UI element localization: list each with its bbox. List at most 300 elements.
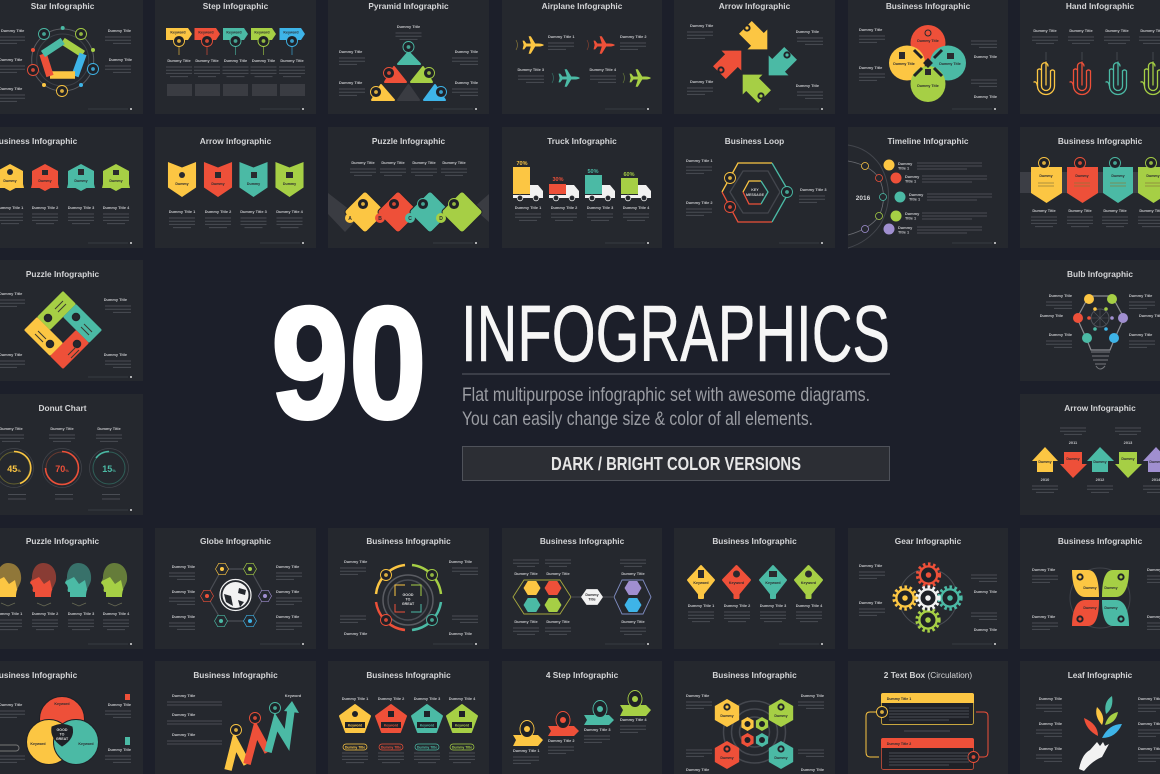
labels: Dummy Title [108, 747, 132, 752]
pentagons: Keyword [420, 724, 434, 728]
ring diagram: TO [406, 598, 411, 602]
shield arrows [168, 162, 304, 197]
hexagon badges: Dummy [3, 179, 17, 183]
labels: Dummy Title 4 [103, 611, 130, 616]
head silhouettes [0, 563, 127, 606]
labels: Dummy Title 2 [32, 611, 59, 616]
labels: Dummy Title [1068, 208, 1092, 213]
timeline labels: Title 1 [905, 178, 917, 184]
panel: pyramid infographic [328, 0, 489, 114]
panel: rising zigzag [155, 661, 316, 774]
banner tags: Dummy [1146, 174, 1160, 178]
step labels and boxes [166, 58, 305, 96]
step tags [166, 28, 305, 55]
banner tags [1020, 158, 1160, 203]
year labels: 2013 [1124, 440, 1133, 445]
heading: Pyramid Infographic [368, 1, 449, 11]
labels: Dummy Title 4 [589, 67, 617, 72]
labels: Dummy Title [621, 619, 645, 624]
ring diagram [376, 565, 441, 630]
panel: business loop [674, 127, 835, 248]
step tags: Keyword [254, 30, 270, 34]
diamonds: Keyword [693, 581, 709, 585]
labels: Dummy Title [1033, 28, 1057, 33]
labels: Dummy Title [344, 631, 368, 636]
timeline labels: Title 1 [909, 196, 921, 202]
hexagon diagram: Dummy [720, 756, 734, 760]
banner tags: Dummy [1039, 174, 1053, 178]
venn circles: GREAT [56, 737, 69, 741]
labels [169, 564, 302, 629]
labels: Dummy Title 2 [620, 34, 647, 39]
labels: Dummy Title [1129, 332, 1153, 337]
truck bars: 50% [587, 169, 599, 175]
heading: Business Infographic [366, 670, 451, 680]
banner tags: Dummy [1111, 174, 1125, 178]
hexagon clusters [513, 580, 651, 614]
puzzle pieces [328, 191, 489, 233]
gears [894, 564, 961, 631]
year labels: 2010 [1041, 477, 1049, 482]
hand icons [1034, 52, 1160, 94]
panel: arrow cycle infographic [674, 0, 835, 114]
panel: gear infographic [848, 528, 1008, 649]
labels: Dummy Title [397, 24, 421, 29]
labels [1032, 567, 1160, 629]
hand with leaves [1079, 696, 1122, 771]
labels: Dummy Title [1040, 313, 1064, 318]
hexagon loop [722, 163, 792, 222]
hexagon badges: Dummy [38, 179, 52, 183]
four petal diagram: Dummy Title [917, 84, 939, 88]
pentagons: Keyword [384, 724, 398, 728]
timeline labels: Dummy [909, 192, 924, 197]
hexagon loop: KEY [751, 188, 759, 192]
labels: Dummy Title [108, 28, 132, 33]
step flags [513, 690, 651, 746]
leaf quadrant diagram: Dummy [1083, 606, 1097, 610]
labels: Dummy Title [546, 619, 570, 624]
labels: Dummy Title [442, 160, 466, 165]
step labels and boxes: Dummy Title [224, 58, 248, 63]
panel: business petals [848, 0, 1008, 114]
panel: bulb infographic [1020, 260, 1160, 381]
panel: leaf quadrants [1020, 528, 1160, 649]
hexagon diagram: Dummy [774, 714, 788, 718]
heading: Business Loop [725, 136, 784, 146]
labels: Dummy Title [449, 559, 473, 564]
labels: Dummy Title [276, 589, 300, 594]
panel: arrow timeline [1020, 394, 1160, 515]
labels: Dummy Title [455, 80, 479, 85]
leaf quadrant diagram: Dummy [1104, 606, 1118, 610]
pentagons: Dummy Title [452, 746, 472, 750]
heading: Business Infographic [193, 670, 278, 680]
labels: Dummy Title [339, 80, 363, 85]
labels: Dummy Title 3 [587, 205, 614, 210]
labels [0, 205, 130, 224]
puzzle pieces: A [348, 216, 352, 222]
heading: Arrow Infographic [200, 136, 272, 146]
labels: Dummy Title [449, 631, 473, 636]
heading: Hand Infographic [1066, 1, 1134, 11]
labels [340, 559, 478, 636]
star ring diagram [28, 26, 98, 96]
panel: 4 step infographic [502, 661, 662, 774]
labels: Dummy Title [974, 589, 998, 594]
labels [688, 603, 823, 622]
heading: Bulb Infographic [1067, 269, 1133, 279]
labels: Dummy Title [172, 693, 196, 698]
labels: Dummy Title [514, 571, 538, 576]
heading: Business Infographic [712, 670, 797, 680]
diamond puzzle [26, 293, 100, 367]
step labels and boxes: Dummy Title [195, 58, 219, 63]
timeline labels: Title 1 [905, 216, 917, 220]
banner tags: Dummy [1075, 174, 1089, 178]
labels [513, 717, 647, 763]
labels: Dummy Title 3 [800, 187, 827, 192]
diamonds: Keyword [729, 581, 744, 585]
hero: subtitle: You can easily change size & color of all elements. [462, 408, 813, 430]
panel: airplane infographic [502, 0, 662, 114]
panel: arrow shields [155, 127, 316, 248]
labels: Dummy Title [455, 49, 479, 54]
pentagons [340, 705, 477, 750]
panel: business tags [1020, 127, 1160, 248]
panel: hexagon groups [502, 528, 662, 649]
step labels and boxes: Dummy Title [167, 58, 191, 63]
panel: 2 text box circulation [848, 661, 1008, 774]
labels [1032, 28, 1160, 43]
panel: venn diagram [0, 661, 143, 774]
labels [517, 34, 647, 82]
labels: Dummy Title [1069, 28, 1093, 33]
labels: Dummy Title [974, 94, 998, 99]
timeline labels: Dummy [905, 211, 920, 216]
hero: version box [462, 446, 890, 480]
heading: Leaf Infographic [1068, 670, 1133, 680]
labels: Dummy Title [351, 160, 375, 165]
timeline labels: Dummy [898, 225, 913, 230]
hexagon diagram [715, 699, 793, 769]
pentagons: Dummy Title [417, 746, 437, 750]
labels: Dummy Title [690, 79, 714, 84]
text box loop: Dummy Title 1 [887, 697, 911, 701]
hexagon clusters: Dummy [585, 593, 599, 597]
four petal diagram: Dummy Title [917, 39, 939, 43]
text box loop: Dummy Title 2 [887, 742, 911, 746]
panel: business badges [0, 127, 143, 248]
labels: Dummy Title 2 [205, 209, 232, 214]
heading: Globe Infographic [200, 536, 271, 546]
labels [0, 426, 122, 499]
labels: Dummy Title [686, 767, 710, 772]
heading: 2 Text Box (Circulation) [884, 670, 972, 680]
hexagon badges [0, 164, 130, 191]
labels: Dummy Title [344, 559, 368, 564]
truck bars [513, 161, 651, 201]
shield arrows: Dummy [175, 182, 189, 186]
labels: Dummy Title [859, 563, 883, 568]
timeline labels: Title 1 [898, 230, 910, 234]
labels: Dummy Title [859, 27, 883, 32]
panel: diamond tags [674, 528, 835, 649]
labels: Dummy Title 3 [68, 205, 95, 210]
hexagon diagram: Dummy [720, 714, 734, 718]
labels: Dummy Title 1 [169, 209, 196, 214]
labels: Dummy Title 3 [517, 67, 545, 72]
hexagon badges: Dummy [109, 179, 123, 183]
heading: Step Infographic [203, 1, 269, 11]
heading: Arrow Infographic [719, 1, 791, 11]
labels: Dummy Title 1 [515, 205, 542, 210]
labels: Dummy Title 3 [240, 209, 268, 214]
timeline arc [848, 145, 906, 248]
labels: Dummy Title 4 [276, 209, 304, 214]
donut charts: 45% [7, 464, 21, 474]
labels [686, 158, 827, 215]
airplanes [516, 36, 651, 87]
venn circles: Keyword [30, 742, 46, 746]
puzzle pieces: D [439, 216, 443, 222]
venn circles: Keyword [54, 702, 70, 706]
labels [687, 23, 823, 98]
step labels and boxes: Dummy Title [252, 58, 276, 63]
donut charts: 15% [102, 464, 116, 474]
labels: Dummy Title 3 [68, 611, 95, 616]
heading: Donut Chart [39, 403, 87, 413]
labels: Dummy Title 1 [342, 696, 369, 701]
hexagon loop: MESSAGE [746, 193, 765, 197]
labels: Dummy Title [172, 712, 196, 717]
step labels and boxes: Dummy Title [280, 58, 304, 63]
four petal diagram: Dummy Title [939, 62, 961, 66]
labels: Dummy Title [1049, 293, 1073, 298]
labels: Dummy Title [1039, 746, 1063, 751]
hero: title INFOGRAPHICS: INFOGRAPHICS [461, 289, 890, 378]
panel: puzzle heads [0, 528, 143, 649]
year labels: 2012 [1096, 477, 1105, 482]
labels: Dummy Title 2 [686, 200, 713, 205]
shield arrows: Dummy [283, 182, 296, 186]
up and down arrows: Dummy [1066, 457, 1080, 461]
heading: Business Infographic [712, 536, 797, 546]
venn circles [26, 696, 98, 764]
heading: Puzzle Infographic [26, 536, 100, 546]
panel: step infographic [155, 0, 316, 114]
labels: Dummy Title [276, 614, 300, 619]
hero: big number 90: 90 [271, 273, 427, 452]
year labels: 2011 [1069, 440, 1078, 445]
labels: Dummy Title [381, 160, 405, 165]
labels [0, 28, 133, 101]
labels [339, 24, 479, 95]
labels: Dummy Title [1039, 696, 1063, 701]
panel: donut chart [0, 394, 143, 515]
labels: Dummy Title [1129, 293, 1153, 298]
labels: Dummy Title [974, 54, 998, 59]
labels: Dummy Title [1105, 28, 1129, 33]
panel: good to great rings [328, 528, 489, 649]
panel: puzzle diamond [0, 260, 143, 381]
ring diagram: GOOD [403, 593, 414, 597]
pentagons: Dummy Title [381, 746, 401, 750]
labels: Dummy Title 2 [551, 205, 578, 210]
heading: Puzzle Infographic [26, 269, 100, 279]
truck bars: 70% [516, 161, 528, 167]
text box loop [866, 693, 988, 770]
diamonds [688, 566, 822, 598]
labels: Dummy Title [801, 767, 825, 772]
hexagon clusters: Title [588, 598, 596, 602]
pentagons: Dummy Title [345, 746, 365, 750]
labels: Dummy Title [172, 564, 196, 569]
labels [1036, 696, 1160, 761]
donut charts [0, 448, 128, 488]
timeline labels: Dummy [905, 174, 920, 179]
diamonds: Keyword [765, 581, 781, 585]
heading: Business Infographic [886, 1, 971, 11]
labels: Dummy Title [172, 732, 196, 737]
labels: Dummy Title 4 [620, 717, 647, 722]
timeline labels [898, 161, 992, 234]
timeline labels: Title 1 [898, 166, 910, 170]
labels: Dummy Title 3 [584, 727, 611, 732]
labels [686, 693, 825, 772]
shield arrows: Dummy [247, 182, 260, 186]
shield arrows: Dummy [211, 182, 225, 186]
panel: hexagon flower [674, 661, 835, 774]
year labels [1032, 428, 1160, 492]
panel: pentagon infographic [328, 661, 489, 774]
labels: Dummy Title 3 [760, 603, 787, 608]
up and down arrows: Dummy [1121, 457, 1135, 461]
truck bars: 30% [552, 177, 564, 183]
rising zigzag arrow [228, 701, 299, 770]
labels: Dummy Title [974, 627, 998, 632]
four petal diagram: Dummy Title [893, 62, 915, 66]
labels: Dummy Title [686, 693, 710, 698]
heading: Truck Infographic [547, 136, 617, 146]
labels: Dummy Title [1, 28, 25, 33]
labels: Dummy Title 2 [724, 603, 751, 608]
labels: Dummy Title [276, 564, 300, 569]
labels: Dummy Title 1 [688, 603, 715, 608]
labels [513, 560, 646, 634]
labels: Dummy Title [172, 614, 196, 619]
leaf quadrant diagram [1070, 568, 1130, 628]
heading: Business Infographic [540, 536, 625, 546]
hero: version box: DARK / BRIGHT COLOR VERSIONS [551, 453, 801, 474]
pentagons: Keyword [455, 724, 469, 728]
panel: leaf infographic [1020, 661, 1160, 774]
timeline arc: 2016 [856, 195, 871, 202]
labels: Dummy Title [1103, 208, 1127, 213]
labels [859, 563, 998, 632]
labels: Dummy Title [796, 83, 820, 88]
labels [169, 209, 304, 228]
panel: globe infographic [155, 528, 316, 649]
labels [0, 291, 131, 367]
labels: Dummy Title 4 [449, 696, 476, 701]
heading: Star Infographic [31, 1, 95, 11]
timeline labels: Dummy [898, 161, 913, 166]
labels: Dummy Title 1 [686, 158, 713, 163]
labels: Dummy Title [50, 426, 74, 431]
heading: Gear Infographic [895, 536, 962, 546]
labels: Dummy Title [801, 693, 825, 698]
labels: Dummy Title [109, 57, 133, 62]
hexagon diagram: Dummy [774, 756, 788, 760]
labels [0, 611, 130, 630]
leaf quadrant diagram: Dummy [1104, 586, 1118, 590]
labels: Dummy Title [859, 600, 883, 605]
labels: Dummy Title [97, 426, 121, 431]
up and down arrows: Dummy [1038, 460, 1052, 464]
panel: truck infographic [502, 127, 662, 248]
heading: 4 Step Infographic [546, 670, 619, 680]
labels [167, 693, 302, 744]
puzzle pieces: C [408, 216, 412, 222]
venn circles: Keyword [78, 742, 94, 746]
labels: Dummy Title [859, 65, 883, 70]
labels: Dummy Title 1 [513, 748, 540, 753]
up and down arrows [1032, 447, 1160, 478]
heading: Business Infographic [366, 536, 451, 546]
labels [350, 160, 467, 175]
labels [342, 696, 476, 763]
donut charts: 70% [55, 464, 69, 474]
labels [0, 694, 132, 762]
labels: Dummy Title [621, 571, 645, 576]
labels: Dummy Title [108, 702, 132, 707]
labels: Dummy Title 4 [623, 205, 650, 210]
labels: Dummy Title [1032, 208, 1056, 213]
labels: Dummy Title 1 [548, 34, 575, 39]
hero: subtitle [462, 374, 890, 430]
labels: Dummy Title [514, 619, 538, 624]
diamonds: Keyword [801, 581, 816, 585]
labels: Dummy Title 3 [414, 696, 441, 701]
labels [1040, 293, 1160, 347]
bulb diagram [1073, 294, 1128, 369]
truck bars: 60% [623, 172, 635, 178]
step tags: Keyword [226, 30, 242, 34]
panel: timeline infographic [848, 127, 1008, 248]
up and down arrows: Dummy [1093, 460, 1107, 464]
labels: Dummy Title [1039, 721, 1063, 726]
step tags: Keyword [283, 30, 299, 34]
hexagon badges: Dummy [74, 179, 88, 183]
heading: Timeline Infographic [888, 136, 969, 146]
heading: Business Infographic [1058, 536, 1143, 546]
labels: Dummy Title 2 [32, 205, 59, 210]
labels: Dummy Title [412, 160, 436, 165]
labels [859, 27, 998, 99]
labels: Dummy Title [339, 49, 363, 54]
venn circles: TO [60, 732, 65, 736]
labels: Dummy Title [0, 426, 23, 431]
four petal diagram [889, 25, 966, 102]
labels: Dummy Title 2 [378, 696, 405, 701]
labels: Dummy Title [1032, 567, 1056, 572]
step tags: Keyword [198, 30, 214, 34]
labels: Dummy Title [546, 571, 570, 576]
labels: Dummy Title 4 [796, 603, 823, 608]
labels: Dummy Title [104, 297, 128, 302]
pyramid diagram [370, 42, 446, 100]
